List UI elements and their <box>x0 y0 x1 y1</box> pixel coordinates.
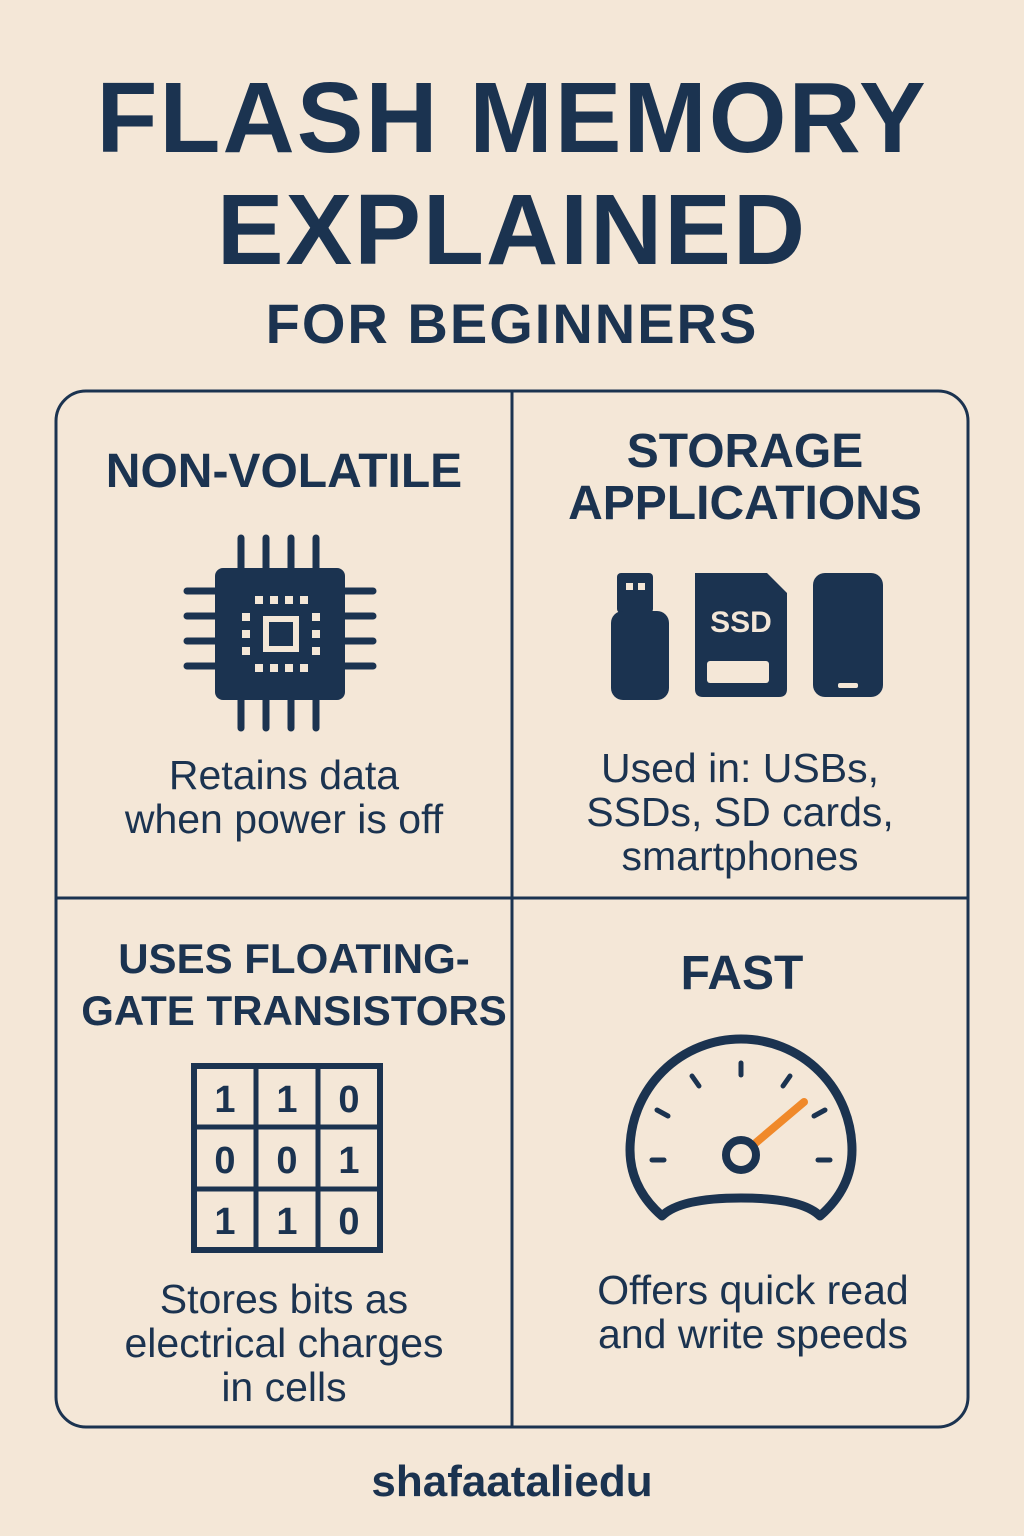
panel: storage applications <box>568 425 922 879</box>
text: stores bits: electrical charges <box>124 1320 444 1366</box>
heading: storage applications: STORAGE <box>627 425 863 478</box>
icon: binary grid: 1 <box>276 1201 298 1243</box>
icon: binary grid: 1 <box>338 1140 360 1182</box>
title: FLASH MEMORY <box>96 62 928 174</box>
text: offers quick <box>597 1267 909 1357</box>
heading: fast: FAST <box>681 947 803 1000</box>
text: retains data: Retains data <box>169 752 399 798</box>
text: stores bits: in cells <box>221 1364 347 1410</box>
subtitle: FOR BEGINNERS <box>266 292 758 355</box>
heading: floating gate <box>81 935 507 1034</box>
text: used in <box>586 745 894 879</box>
heading: non-volatile: NON-VOLATILE <box>106 445 462 498</box>
icon: chip <box>184 534 376 732</box>
title <box>96 62 928 286</box>
icon: binary grid: 1 <box>214 1201 236 1243</box>
panel: fast <box>597 947 909 1357</box>
text: offers quick: Offers quick read <box>597 1267 909 1313</box>
heading: storage applications <box>568 425 922 530</box>
heading: floating gate: USES FLOATING- <box>118 935 470 982</box>
icons: usb, ssd, phone: SSD <box>710 606 772 639</box>
panel: non-volatile <box>106 445 462 842</box>
heading: floating gate: GATE TRANSISTORS <box>81 987 507 1034</box>
footer: shafaataliedu <box>371 1457 653 1506</box>
icon: binary grid: 1 <box>276 1079 298 1121</box>
icon: binary grid: 0 <box>338 1201 360 1243</box>
icon: binary grid: 0 <box>214 1140 236 1182</box>
title: EXPLAINED <box>217 174 807 286</box>
text: offers quick: and write speeds <box>598 1311 908 1357</box>
icon: binary grid: 1 <box>214 1079 236 1121</box>
icon: speedometer <box>626 1034 856 1220</box>
icons: usb, ssd, phone <box>611 573 883 700</box>
icon: binary grid: 0 <box>338 1079 360 1121</box>
text: stores bits: Stores bits as <box>160 1276 408 1322</box>
text: used in: smartphones <box>621 833 858 879</box>
text: used in: SSDs, SD cards, <box>586 789 894 835</box>
text: used in: Used in: USBs, <box>601 745 879 791</box>
panel: floating-gate <box>81 935 507 1410</box>
heading: storage applications: APPLICATIONS <box>568 477 922 530</box>
icon: binary grid <box>191 1063 383 1253</box>
icon: binary grid: 0 <box>276 1140 298 1182</box>
text: retains data: when power is off <box>125 796 443 842</box>
text: stores bits <box>124 1276 444 1410</box>
text: retains data <box>124 752 444 842</box>
